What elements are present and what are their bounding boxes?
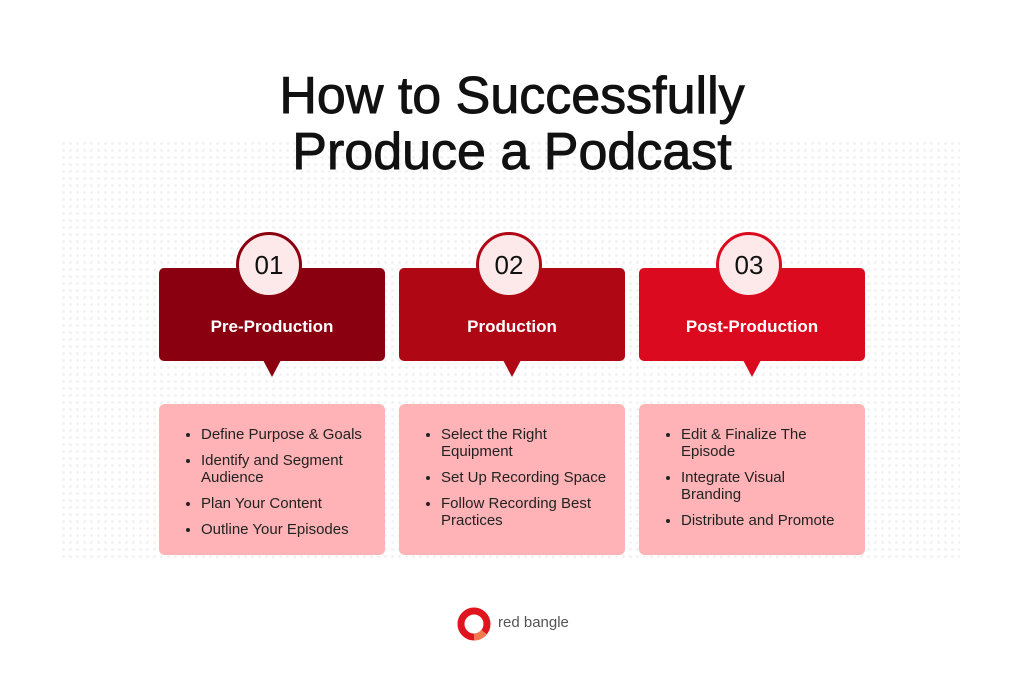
panel: production list <box>399 404 625 555</box>
panel: production list: Set Up Recording Space <box>441 469 606 486</box>
title: How to Successfully <box>279 67 745 125</box>
step 02 header <box>399 232 625 377</box>
panel: post-production list: Integrate Visual Branding <box>681 469 785 503</box>
panel: pre-production list: Plan Your Content <box>201 495 322 512</box>
panel: post-production list: Edit & Finalize The Episode <box>681 426 807 460</box>
title <box>279 67 746 181</box>
panel: pre-production list: Identify and Segment Audience <box>201 452 343 486</box>
badge 02: 02 <box>495 250 523 280</box>
logo: red bangle <box>498 614 569 631</box>
badge 01: 01 <box>255 250 283 280</box>
badge 02 <box>476 232 542 298</box>
step 01 header: Pre-Production <box>211 317 333 336</box>
panel: pre-production list: Define Purpose & Goals <box>201 426 362 443</box>
panel: post-production list: Distribute and Promote <box>681 512 834 529</box>
panel: pre-production list <box>159 404 385 555</box>
badge 01 <box>236 232 302 298</box>
step 03 header <box>639 232 865 377</box>
step 01 header <box>159 232 385 377</box>
logo <box>458 608 569 640</box>
step 02 header: Production <box>467 317 557 336</box>
step 03 header: Post-Production <box>686 317 818 336</box>
title: Produce a Podcast <box>292 123 732 181</box>
panel: production list: Follow Recording Best Practices <box>441 495 591 529</box>
badge 03: 03 <box>735 250 763 280</box>
panel: post-production list <box>639 404 865 555</box>
icon: ring <box>458 608 490 640</box>
badge 03 <box>716 232 782 298</box>
panel: production list: Select the Right Equipment <box>441 426 547 460</box>
panel: pre-production list: Outline Your Episodes <box>201 521 349 538</box>
